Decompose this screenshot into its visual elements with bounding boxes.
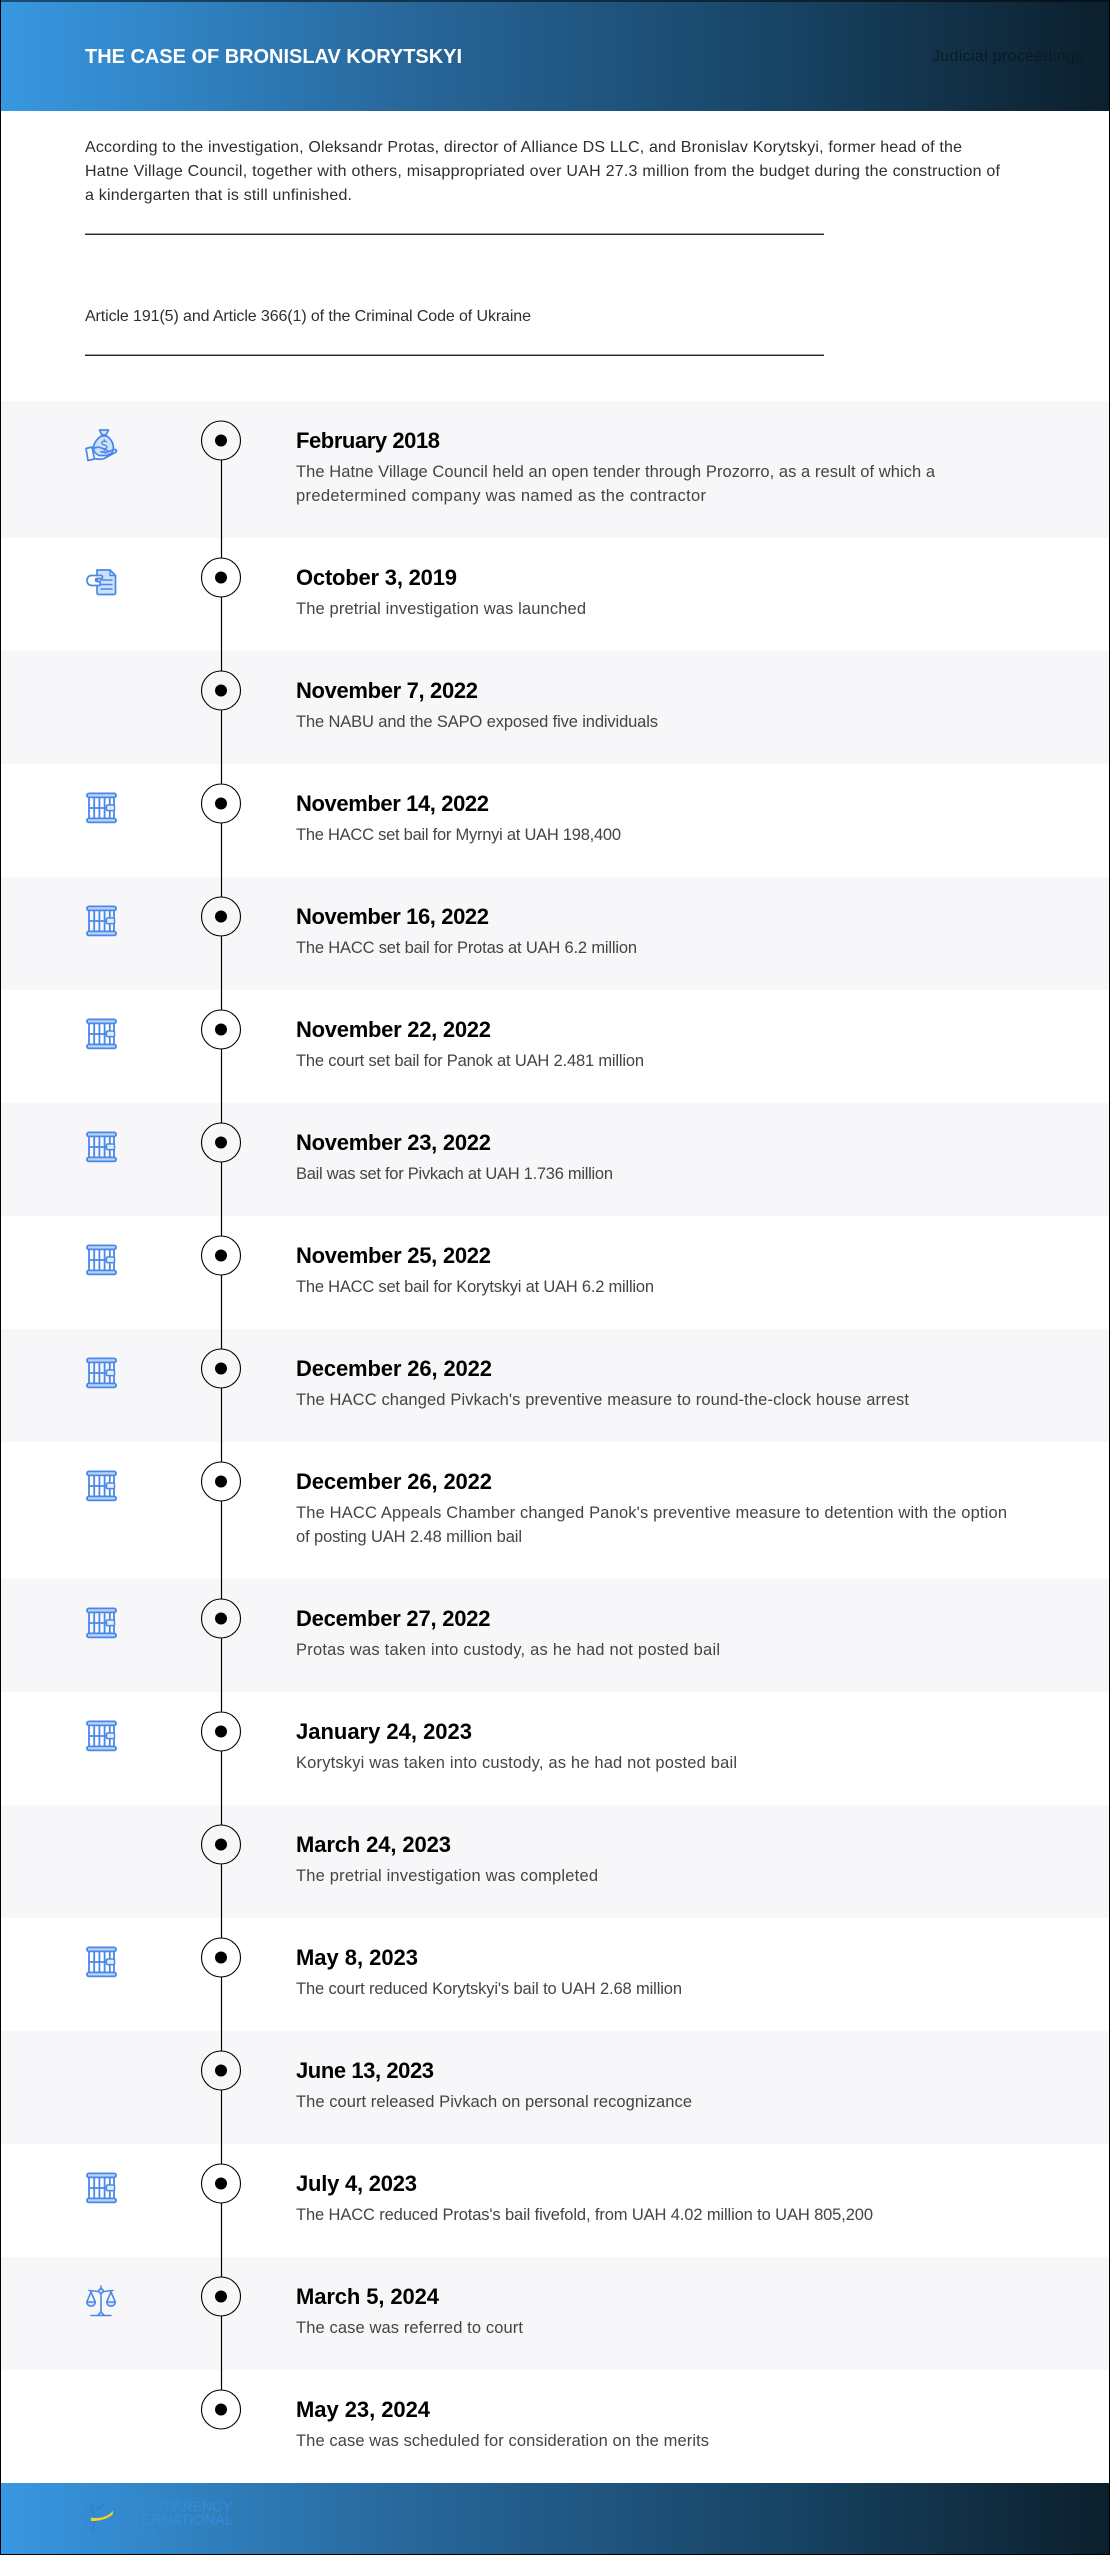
- intro paragraph: [85, 139, 1001, 204]
- row: December 26, 2022 (Pivkach): [0, 1329, 1110, 1442]
- row: December 26, 2022 (Panok): [0, 1442, 1110, 1579]
- description: The pretrial investigation was completed: [296, 1867, 598, 1885]
- description: of posting UAH 2.48 million bail: [296, 1528, 522, 1546]
- icon: prison bars: [87, 793, 116, 822]
- date: June 13, 2023: [296, 2058, 434, 2083]
- date: November 16, 2022: [296, 904, 489, 929]
- description: predetermined company was named as the contractor: [296, 487, 706, 505]
- intro paragraph: Hatne Village Council, together with others, misappropriated over UAH 27.3 million from the budget during the construction of: [85, 163, 1001, 180]
- row: March 5, 2024: [0, 2257, 1110, 2370]
- timeline marker: [202, 421, 240, 460]
- timeline marker: [202, 1123, 240, 1162]
- description: The HACC set bail for Korytskyi at UAH 6.2 million: [296, 1278, 654, 1296]
- description: Bail was set for Pivkach at UAH 1.736 million: [296, 1165, 613, 1183]
- description: Protas was taken into custody, as he had not posted bail: [296, 1641, 720, 1659]
- date: July 4, 2023: [296, 2171, 417, 2196]
- row: November 22, 2022: [0, 990, 1110, 1103]
- timeline marker: [202, 2277, 240, 2316]
- date: May 23, 2024: [296, 2397, 431, 2422]
- description: The court reduced Korytskyi's bail to UAH 2.68 million: [296, 1980, 682, 1998]
- row: December 27, 2022: [0, 1579, 1110, 1692]
- timeline marker: [202, 1462, 240, 1501]
- description: The court set bail for Panok at UAH 2.481 million: [296, 1052, 644, 1070]
- description: The HACC set bail for Myrnyi at UAH 198,400: [296, 826, 621, 844]
- logo: Transparency International Ukraine: INTERNATIONAL: [118, 2512, 233, 2528]
- icon: prison bars: [87, 1245, 116, 1274]
- row: February 2018: [0, 401, 1110, 538]
- row: November 14, 2022: [0, 764, 1110, 877]
- icon: prison bars: [87, 1721, 116, 1750]
- row: November 23, 2022: [0, 1103, 1110, 1216]
- timeline marker: [202, 1938, 240, 1977]
- timeline marker: [202, 2164, 240, 2203]
- date: December 27, 2022: [296, 1606, 490, 1631]
- legal articles text: Article 191(5) and Article 366(1) of the Criminal Code of Ukraine: [85, 308, 531, 325]
- description: The HACC changed Pivkach's preventive measure to round-the-clock house arrest: [296, 1391, 909, 1409]
- date: October 3, 2019: [296, 565, 457, 590]
- logo: Transparency International Ukraine: UKRAINE: [120, 2528, 156, 2536]
- description: The case was scheduled for consideration on the merits: [296, 2432, 709, 2450]
- row: October 3, 2019: [0, 538, 1110, 651]
- icon: prison bars: [87, 1947, 116, 1976]
- timeline marker: [202, 784, 240, 823]
- timeline marker: [202, 671, 240, 710]
- date: November 7, 2022: [296, 678, 478, 703]
- timeline marker: [202, 1010, 240, 1049]
- description: [296, 463, 936, 505]
- row: January 24, 2023: [0, 1692, 1110, 1805]
- icon: prison bars: [87, 1608, 116, 1637]
- timeline marker: [202, 2390, 240, 2429]
- description: The pretrial investigation was launched: [296, 600, 586, 618]
- icon: scales of justice: [87, 2286, 115, 2316]
- timeline marker: [202, 897, 240, 936]
- date: January 24, 2023: [296, 1719, 472, 1744]
- row: May 8, 2023: [0, 1918, 1110, 2031]
- timeline marker: [202, 1825, 240, 1864]
- description: The court released Pivkach on personal recognizance: [296, 2093, 692, 2111]
- row: November 7, 2022: [0, 651, 1110, 764]
- timeline marker: [202, 1599, 240, 1638]
- date: March 24, 2023: [296, 1832, 451, 1857]
- icon: prison bars: [87, 1471, 116, 1500]
- date: November 23, 2022: [296, 1130, 491, 1155]
- description: Korytskyi was taken into custody, as he had not posted bail: [296, 1754, 737, 1772]
- timeline marker: [202, 1236, 240, 1275]
- description: The Hatne Village Council held an open tender through Prozorro, as a result of which a: [296, 463, 936, 481]
- header section label: Judicial proceedings: [932, 48, 1083, 65]
- icon: money bag in hand: [86, 430, 116, 460]
- description: The NABU and the SAPO exposed five individuals: [296, 713, 658, 731]
- date: November 22, 2022: [296, 1017, 491, 1042]
- timeline marker: [202, 2051, 240, 2090]
- date: December 26, 2022: [296, 1469, 492, 1494]
- description: The case was referred to court: [296, 2319, 523, 2337]
- footer band: [0, 2483, 1110, 2555]
- description: The HACC Appeals Chamber changed Panok's preventive measure to detention with the option: [296, 1504, 1007, 1522]
- date: December 26, 2022: [296, 1356, 492, 1381]
- icon: prison bars: [87, 1358, 116, 1387]
- row: May 23, 2024: [0, 2370, 1110, 2483]
- timeline marker: [202, 558, 240, 597]
- row: June 13, 2023: [0, 2031, 1110, 2144]
- intro paragraph: a kindergarten that is still unfinished.: [85, 187, 352, 204]
- description: The HACC reduced Protas's bail fivefold, from UAH 4.02 million to UAH 805,200: [296, 2206, 873, 2224]
- title: THE CASE OF BRONISLAV KORYTSKYI: [85, 46, 462, 68]
- icon: prison bars: [87, 2173, 116, 2202]
- intro paragraph: According to the investigation, Oleksandr Protas, director of Alliance DS LLC, and Bronislav Korytskyi, former head of the: [85, 139, 962, 156]
- icon: document with hand: [87, 570, 116, 594]
- date: November 14, 2022: [296, 791, 489, 816]
- row: July 4, 2023: [0, 2144, 1110, 2257]
- icon: prison bars: [87, 1019, 116, 1048]
- timeline marker: [202, 1712, 240, 1751]
- description: The HACC set bail for Protas at UAH 6.2 million: [296, 939, 637, 957]
- description: [296, 1504, 1007, 1546]
- logo: Transparency International Ukraine: [81, 2498, 233, 2536]
- timeline marker: [202, 1349, 240, 1388]
- date: February 2018: [296, 428, 440, 453]
- date: March 5, 2024: [296, 2284, 440, 2309]
- row: March 24, 2023: [0, 1805, 1110, 1918]
- logo: Transparency International Ukraine: TRANSPARENCY: [117, 2498, 232, 2516]
- icon: prison bars: [87, 1132, 116, 1161]
- row: November 16, 2022: [0, 877, 1110, 990]
- header band: [0, 0, 1110, 111]
- icon: prison bars: [87, 906, 116, 935]
- date: May 8, 2023: [296, 1945, 418, 1970]
- row: November 25, 2022: [0, 1216, 1110, 1329]
- date: November 25, 2022: [296, 1243, 491, 1268]
